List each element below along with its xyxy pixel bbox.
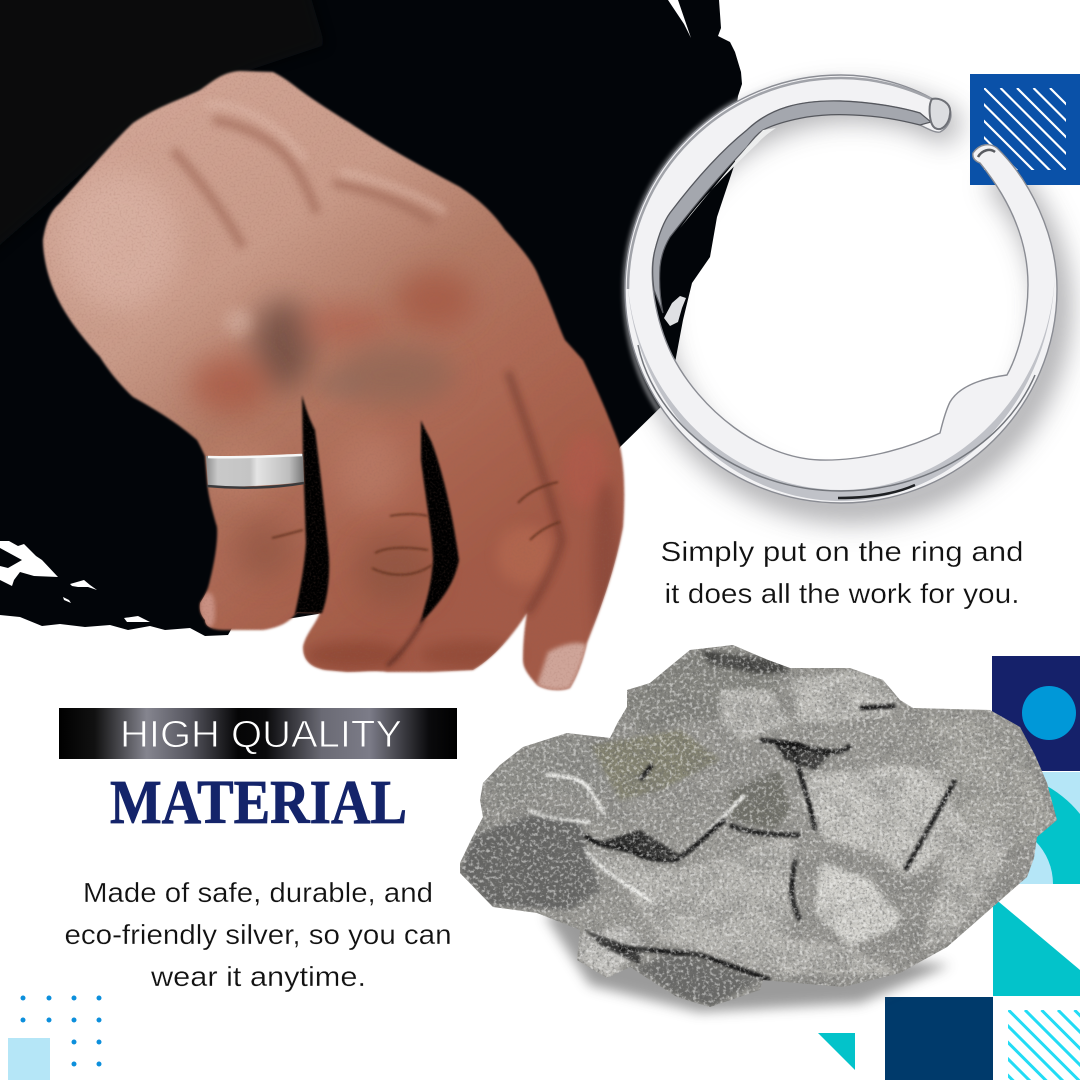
decor: light blue square xyxy=(8,1038,50,1080)
rock crevices xyxy=(585,706,955,980)
ring lower bevel band xyxy=(627,265,1055,501)
ring lower tip xyxy=(978,150,995,157)
decor: dark navy square xyxy=(885,997,993,1080)
rock shadow xyxy=(545,900,950,1012)
title: MATERIAL: MATERIAL xyxy=(110,769,407,837)
decor: blue striped square xyxy=(970,74,1080,185)
sleeve shading xyxy=(0,0,325,280)
black brush backdrop xyxy=(0,0,742,636)
gap: ring and middle finger xyxy=(420,420,459,624)
skin shading xyxy=(40,70,630,690)
decor: small teal triangle xyxy=(818,1033,855,1070)
description: material: wear it anytime. xyxy=(150,961,366,992)
rock body xyxy=(460,645,1057,1007)
ring lower bevel line xyxy=(638,345,1035,491)
ring glow on black xyxy=(625,75,841,425)
crease: ring and middle finger xyxy=(387,618,424,666)
white brush flecks xyxy=(0,0,691,622)
product: split key ring xyxy=(625,75,1057,503)
ring body xyxy=(625,75,1057,503)
key ring cast shadow xyxy=(648,104,1054,506)
decor: cyan striped square xyxy=(1008,1010,1080,1080)
decor: teal triangle xyxy=(993,897,1080,996)
caption: ring xyxy=(660,536,1024,609)
photo: raw silver rock xyxy=(450,640,1070,1012)
description: material: eco-friendly silver, so you can xyxy=(64,919,452,950)
white fleck over black inside ring xyxy=(664,296,686,326)
skin pore texture xyxy=(40,70,630,690)
caption: ring: it does all the work for you. xyxy=(664,578,1020,609)
description: material xyxy=(64,877,452,992)
finger tips xyxy=(537,643,587,690)
decor: navy square with blue circle xyxy=(992,656,1080,771)
tendons xyxy=(173,120,433,247)
ring bottom reflection xyxy=(838,485,915,498)
decor: dot grid xyxy=(20,996,102,1066)
rock mottling xyxy=(472,650,1049,986)
rock highlights xyxy=(530,775,745,905)
rock facets xyxy=(460,650,1055,1007)
bevel highlight xyxy=(680,128,776,228)
label bar: HIGH QUALITY xyxy=(59,708,457,759)
silver ring on finger xyxy=(206,454,304,488)
caption: ring: Simply put on the ring and xyxy=(660,536,1024,567)
hand silhouette xyxy=(43,71,624,690)
inner bevel xyxy=(653,101,931,313)
crease: middle and index finger xyxy=(508,372,562,613)
gap: pinky and ring finger xyxy=(295,395,329,614)
knuckle wrinkles xyxy=(272,482,560,575)
label bar: HIGH QUALITY: HIGH QUALITY xyxy=(120,714,402,756)
ring top edge xyxy=(628,78,948,289)
photo: hand wearing ring xyxy=(40,70,630,690)
decor: light blue square with teal quarter xyxy=(992,772,1080,884)
ring top tip xyxy=(930,99,950,129)
description: material: Made of safe, durable, and xyxy=(83,877,433,908)
